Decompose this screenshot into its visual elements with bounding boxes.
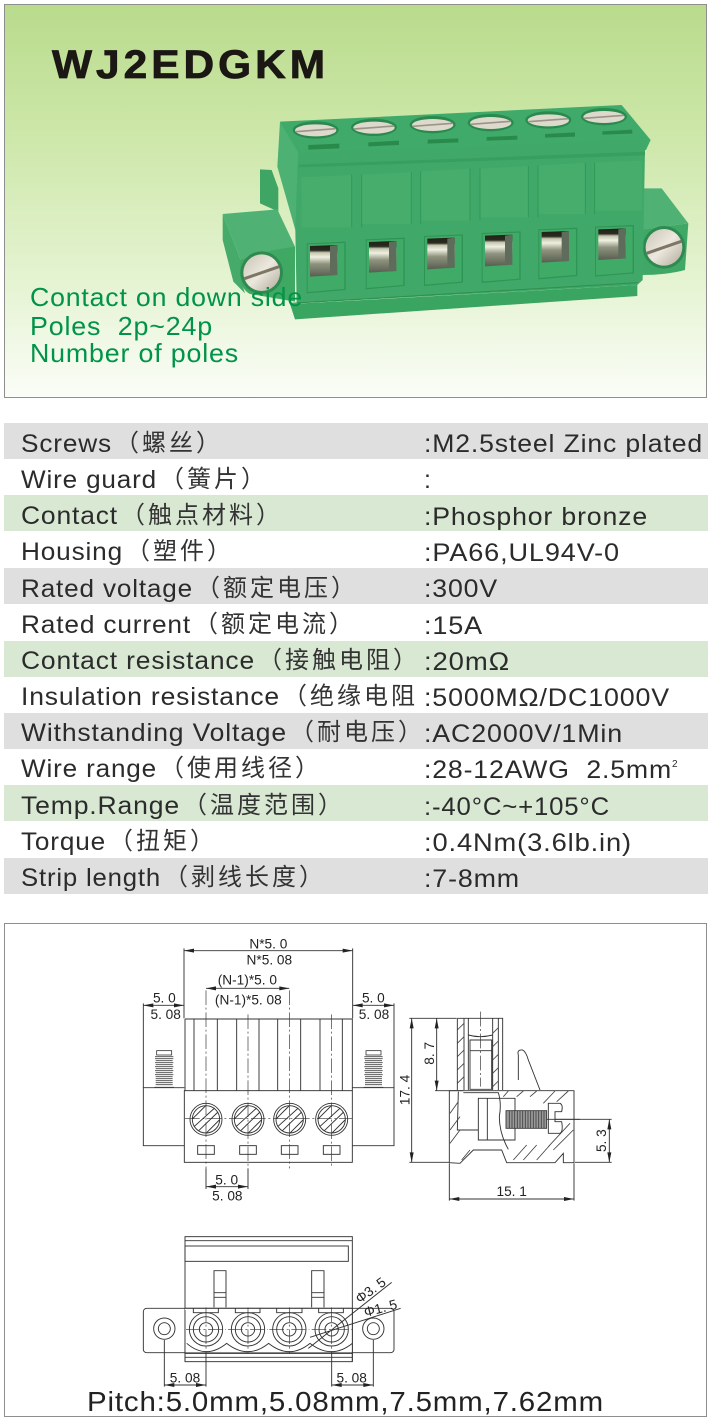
row: temp range: :-40°C~+105°C bbox=[424, 793, 610, 821]
row: contact: （触点材料） bbox=[121, 495, 283, 530]
drawing: front view with dimensions: N*5. 08 bbox=[247, 952, 292, 967]
panel: technical drawings bbox=[4, 924, 706, 1417]
row: housing bbox=[21, 531, 620, 567]
drawing: front view with dimensions: 5. 08 bbox=[212, 1189, 243, 1204]
drawing: front view with dimensions: (N-1)*5. 08 bbox=[215, 992, 282, 1007]
row: rated voltage: （额定电压） bbox=[196, 568, 358, 603]
row: contact resistance: Contact resistance bbox=[21, 647, 255, 675]
drawing: side section view with dimensions: 17. 4 bbox=[397, 1074, 412, 1105]
row: contact resistance bbox=[21, 640, 510, 676]
row: rated current: Rated current bbox=[21, 611, 191, 639]
drawing: front view with dimensions bbox=[143, 936, 394, 1204]
product feature text: Number of poles bbox=[30, 338, 239, 368]
drawing: front view with dimensions: (N-1)*5. 0 bbox=[218, 972, 277, 987]
drawing: bottom view with dimensions: 5. 08 bbox=[170, 1370, 200, 1385]
row: housing: :PA66,UL94V-0 bbox=[424, 539, 620, 567]
row: withstanding voltage: :AC2000V/1Min bbox=[424, 720, 623, 748]
product feature text bbox=[30, 282, 303, 368]
row: temp range: （温度范围） bbox=[183, 785, 345, 820]
row: withstanding voltage bbox=[21, 712, 623, 748]
row: contact: Contact bbox=[21, 502, 118, 530]
drawing: side section view with dimensions: 5. 3 bbox=[594, 1129, 609, 1152]
row: screws: :M2.5steel Zinc plated bbox=[424, 430, 703, 458]
product photo: green terminal block connector bbox=[223, 105, 688, 319]
row: contact: :Phosphor bronze bbox=[424, 503, 648, 531]
drawing: front view with dimensions: N*5. 0 bbox=[249, 936, 288, 951]
row: torque: （扭矩） bbox=[109, 821, 217, 856]
row: screws: Screws bbox=[21, 430, 112, 458]
row: withstanding voltage: Withstanding Voltage bbox=[21, 719, 287, 747]
drawing: front view with dimensions: 5. 08 bbox=[359, 1007, 389, 1022]
row: temp range: Temp.Range bbox=[21, 792, 180, 820]
row: contact resistance: :20mΩ bbox=[424, 648, 510, 676]
row: wire guard: : bbox=[424, 466, 432, 494]
row: housing: Housing bbox=[21, 538, 123, 566]
row: rated voltage: Rated voltage bbox=[21, 575, 193, 603]
drawing: side section view with dimensions bbox=[397, 1012, 612, 1201]
row: rated current: （额定电流） bbox=[194, 604, 356, 639]
row: torque: :0.4Nm(3.6lb.in) bbox=[424, 829, 632, 857]
specification table bbox=[4, 423, 708, 894]
row: strip length: :7-8mm bbox=[424, 865, 520, 893]
product feature text: Poles 2p~24p bbox=[30, 311, 213, 341]
row: contact bbox=[21, 495, 648, 531]
row: wire guard: Wire guard bbox=[21, 466, 157, 494]
drawing: bottom view with dimensions: Φ3. 5 bbox=[353, 1274, 389, 1306]
panel: product header bbox=[4, 4, 706, 398]
row: withstanding voltage: （耐电压） bbox=[290, 712, 425, 747]
row: temp range bbox=[21, 785, 610, 821]
row: insulation resistance: Insulation resistance bbox=[21, 683, 280, 711]
row: screws: （螺丝） bbox=[115, 423, 223, 458]
row: strip length: Strip length bbox=[21, 864, 161, 892]
row: insulation resistance bbox=[21, 676, 670, 712]
row: strip length bbox=[21, 857, 520, 893]
drawing: front view with dimensions: 5. 0 bbox=[215, 1172, 238, 1187]
drawing: side section view with dimensions: 15. 1 bbox=[496, 1184, 527, 1199]
row: contact resistance: （接触电阻） bbox=[258, 640, 420, 675]
row: wire guard bbox=[21, 459, 432, 494]
row: wire range: 2 bbox=[672, 759, 678, 770]
row: rated voltage: :300V bbox=[424, 575, 498, 603]
row: wire range bbox=[21, 748, 678, 784]
row: torque: Torque bbox=[21, 828, 106, 856]
row: rated current bbox=[21, 604, 483, 640]
row: insulation resistance: :5000MΩ/DC1000V bbox=[424, 684, 670, 712]
row: torque bbox=[21, 821, 632, 857]
row: insulation resistance: （绝缘电阻 bbox=[283, 676, 418, 711]
title: WJ2EDGKM bbox=[52, 42, 329, 87]
drawing: front view with dimensions: 5. 0 bbox=[362, 991, 385, 1006]
drawing: bottom view with dimensions: Φ1. 5 bbox=[362, 1297, 399, 1320]
row: wire range: Wire range bbox=[21, 755, 157, 783]
product feature text: Contact on down side bbox=[30, 282, 303, 312]
row: screws bbox=[21, 423, 703, 458]
drawing: front view with dimensions: 5. 0 bbox=[153, 991, 176, 1006]
row: housing: （塑件） bbox=[126, 531, 234, 566]
row: rated current: :15A bbox=[424, 612, 483, 640]
drawing: side section view with dimensions: 8. 7 bbox=[422, 1042, 437, 1065]
row: wire range: :28-12AWG 2.5mm bbox=[424, 756, 672, 784]
drawing: bottom view with dimensions: 5. 08 bbox=[336, 1370, 367, 1385]
row: wire range: （使用线径） bbox=[160, 748, 322, 783]
drawing: bottom view with dimensions bbox=[143, 1237, 401, 1387]
pitch caption: Pitch:5.0mm,5.08mm,7.5mm,7.62mm bbox=[87, 1386, 604, 1417]
row: rated voltage bbox=[21, 568, 498, 603]
drawing: front view with dimensions: 5. 08 bbox=[150, 1007, 181, 1022]
row: wire guard: （簧片） bbox=[160, 459, 268, 494]
row: strip length: （剥线长度） bbox=[164, 857, 326, 892]
